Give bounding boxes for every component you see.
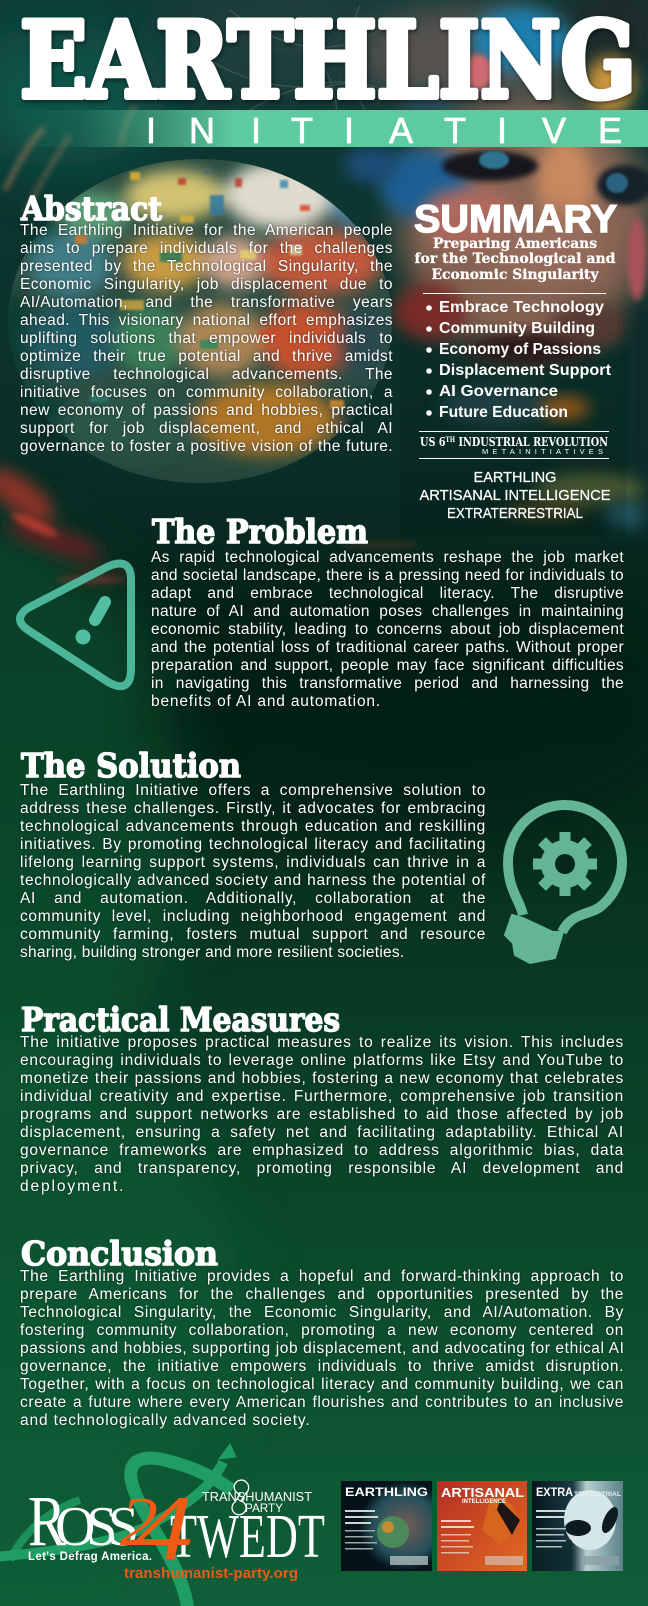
problem body text: in navigating this transformative period and harnessing the — [151, 675, 624, 692]
panel: summary — [414, 198, 618, 522]
measures body text: encouraging individuals to leverage online platforms like Etsy and YouTube to — [20, 1052, 624, 1069]
problem body text: nature of AI and automation poses challenges in maintaining — [151, 603, 624, 620]
panel: the solution — [20, 750, 621, 962]
poster: Artisanal Intelligence — [437, 1481, 527, 1571]
abstract body text: The Earthling Initiative for the American people — [20, 222, 393, 239]
measures body text: monetize their passions and hobbies, fostering a new economy that celebrates — [20, 1070, 624, 1087]
subtitle band: INITIATIVE — [42, 110, 648, 147]
measures body text: displacement, ensuring a safety net and facilitating adaptability. Ethical AI — [20, 1124, 624, 1141]
logo number 24: 2 — [120, 1484, 158, 1561]
conclusion body text: The Earthling Initiative provides a hopeful and forward-thinking approach to — [20, 1268, 624, 1285]
initiatives list: EARTHLING — [474, 469, 556, 486]
summary subtitle: Preparing Americans — [433, 236, 597, 252]
measures body text: The initiative proposes practical measures to realize its vision. This includes — [20, 1034, 624, 1051]
logo party name: PARTY — [245, 1501, 283, 1515]
icon: lightbulb with gear — [503, 800, 627, 964]
conclusion body text: governance, the initiative empowers individuals to thrive amidst disruption. — [20, 1358, 624, 1375]
conclusion body text: and technologically advanced society. — [20, 1412, 311, 1429]
revolution label — [420, 435, 608, 456]
abstract body text: Economic Singularity, job displacement due to — [20, 276, 393, 293]
measures body text — [20, 1034, 624, 1195]
problem body text — [151, 549, 624, 710]
logo website: transhumanist-party.org — [124, 1565, 298, 1582]
summary subtitle: Economic Singularity — [432, 267, 600, 283]
panel: the problem — [151, 515, 624, 710]
problem body text: As rapid technological advancements reshape the job market — [151, 549, 624, 566]
abstract body text: ahead. This visionary national effort emphasizes — [20, 312, 393, 329]
summary bullet list: Economy of Passions — [439, 341, 601, 358]
poster: Earthling: EARTHLING — [345, 1485, 428, 1499]
summary bullet list: Future Education — [439, 404, 568, 421]
abstract body text: governance to foster a positive vision of the future. — [20, 438, 393, 455]
globe — [0, 150, 400, 490]
poster: Extraterrestrial: EXTRA — [536, 1487, 573, 1499]
abstract body text: disruptive technological advancements. The — [20, 366, 393, 383]
solution body text: lifelong learning support systems, individuals can thrive in a — [20, 854, 486, 871]
summary bullet list: AI Governance — [439, 383, 558, 400]
poster: Earthling — [341, 1481, 432, 1571]
summary bullet list: Community Building — [439, 320, 595, 337]
conclusion body text: prepare Americans for the challenges and opportunities presented by the — [20, 1286, 624, 1303]
logo wordmark Ross — [28, 1481, 325, 1571]
problem body text: adapt and embrace technological literacy. The disruptive — [151, 585, 624, 602]
solution body text: The Earthling Initiative offers a comprehensive solution to — [20, 782, 486, 799]
measures body text: privacy, and transparency, promoting responsible AI development and — [20, 1160, 624, 1177]
measures body text: individual creativity and expertise. Furthermore, comprehensive job transition — [20, 1088, 624, 1105]
problem body text: economic stability, leading to concerns about job displacement — [151, 621, 624, 638]
summary heading: SUMMARY — [414, 198, 617, 241]
solution body text: initiatives. By promoting technological literacy and facilitating — [20, 836, 486, 853]
poster: Extraterrestrial: TERRESTRIAL — [574, 1491, 621, 1498]
logo party name: TRANSHUMANIST — [202, 1489, 312, 1504]
conclusion body text: fostering community collaboration, promoting a new economy centered on — [20, 1322, 624, 1339]
abstract body text: presented by the Technological Singularity, the — [20, 258, 393, 275]
panel: practical measures — [20, 1002, 624, 1195]
conclusion body text: Together, with a focus on technological literacy and community building, we can — [20, 1376, 624, 1393]
posters: three initiative thumbnails — [341, 1481, 623, 1571]
conclusion body text: create a future where every American flourishes and contributes to an inclusive — [20, 1394, 624, 1411]
logo number 24 — [120, 1477, 193, 1579]
measures body text: governance frameworks are emphasized to address algorithmic bias, data — [20, 1142, 624, 1159]
summary bullet list — [426, 299, 612, 421]
initiatives list: EXTRATERRESTRIAL — [447, 505, 583, 522]
summary subtitle — [414, 236, 616, 283]
summary dark overlay panel — [400, 190, 626, 535]
solution body text — [20, 782, 486, 961]
solution body text: address these challenges. Firstly, it advocates for embracing — [20, 800, 486, 817]
face — [344, 0, 648, 540]
summary bullet list: Displacement Support — [439, 362, 612, 379]
problem body text: benefits of AI and automation. — [151, 693, 381, 710]
problem body text: and the potential loss of traditional career paths. Without proper — [151, 639, 624, 656]
revolution label: METAINITIATIVES — [482, 447, 603, 456]
revolution label: TH — [446, 435, 455, 444]
poster: Artisanal Intelligence: INTELLIGENCE — [462, 1499, 506, 1505]
logo number 24: 4 — [135, 1477, 193, 1579]
poster: Extraterrestrial — [532, 1481, 623, 1571]
summary subtitle: for the Technological and — [414, 251, 616, 267]
abstract body text: AI/Automation, and the transformative years — [20, 294, 393, 311]
solution body text: community level, including neighborhood engagement and — [20, 908, 486, 925]
abstract body text — [20, 222, 393, 455]
logo tagline: Let's Defrag America. — [28, 1551, 152, 1563]
solution body text: community farming, fosters mutual support and resource — [20, 926, 486, 943]
abstract body text: new economy of passions and hobbies, practical — [20, 402, 393, 419]
lower-left painted streaks — [0, 459, 645, 583]
solution body text: AI and automation. Additionally, collaboration at the — [20, 890, 486, 907]
solution body text: sharing, building stronger and more resilient societies. — [20, 944, 404, 961]
abstract body text: support for job displacement, and ethical AI — [20, 420, 393, 437]
conclusion body text: passions and hobbies, supporting job displacement, and advocating for ethical AI — [20, 1340, 625, 1357]
conclusion body text: Technological Singularity, the Economic Singularity, and AI/Automation. By — [20, 1304, 624, 1321]
measures body text: programs and support networks are established to aid those affected by job — [20, 1106, 624, 1123]
logo wordmark Ross: OSS — [55, 1496, 139, 1558]
logo swoosh — [0, 1444, 236, 1606]
abstract body text: optimize their true potential and thrive amidst — [20, 348, 393, 365]
abstract body text: uplifting solutions that empower individuals to — [20, 330, 393, 347]
initiatives list: ARTISANAL INTELLIGENCE — [420, 487, 610, 504]
measures body text: deployment. — [20, 1178, 125, 1195]
revolution label: INDUSTRIAL REVOLUTION — [455, 435, 608, 449]
solution body text: technologically advanced society and harness the potential of — [20, 872, 486, 889]
logo party name — [202, 1480, 312, 1515]
abstract body text: initiative focuses on community collaboration, a — [20, 384, 393, 401]
abstract body text: aims to prepare individuals for the challenges — [20, 240, 393, 257]
solution body text: technological advancements through education and reskilling — [20, 818, 486, 835]
initiatives list — [420, 469, 610, 522]
problem body text: and societal landscape, there is a pressing need for individuals to — [151, 567, 624, 584]
poster: Artisanal Intelligence: ARTISANAL — [441, 1486, 524, 1500]
icon: warning triangle — [16, 560, 135, 690]
problem body text: preparation and support, people may face significant difficulties — [151, 657, 624, 674]
panel: conclusion — [20, 1236, 625, 1430]
revolution label: US 6 — [420, 435, 452, 449]
summary bullet list: Embrace Technology — [439, 299, 604, 316]
logo: Ross 24 Twedt, Transhumanist Party — [0, 1443, 325, 1606]
logo wordmark Ross: R — [28, 1481, 66, 1561]
conclusion body text — [20, 1268, 625, 1430]
panel: abstract — [20, 190, 619, 910]
